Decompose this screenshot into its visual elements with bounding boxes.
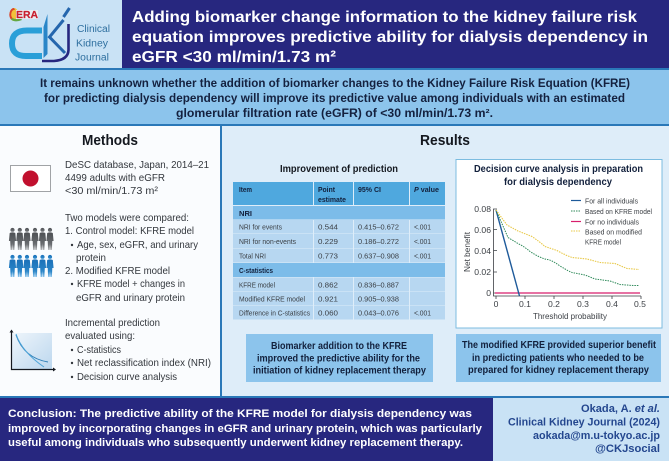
text: models compared: Two models were compared: <box>65 212 189 224</box>
table header: Point <box>318 185 335 194</box>
x axis labels: 0.2 <box>548 299 560 309</box>
row: NRI for non-events <box>233 234 445 248</box>
citation panel: Okada, A. et al. <box>581 403 660 415</box>
chart legend: Based on modified <box>585 228 642 236</box>
text: incremental prediction: Decision curve analysis <box>77 371 177 383</box>
chart title <box>474 163 643 188</box>
y axis labels: 0.02 <box>474 267 491 277</box>
callout: biomarker addition: initiation of kidney replacement therapy <box>253 364 426 376</box>
text: database and cohort: 4499 adults with eGFR <box>65 172 165 184</box>
chart legend <box>571 196 652 246</box>
row: NRI for non-events: <.001 <box>414 237 431 246</box>
icon: modified group people <box>9 255 54 277</box>
x axis labels: 0.1 <box>519 299 531 309</box>
section row: NRI: NRI <box>239 209 252 218</box>
conclusion banner: useful among individuals who subsequently underwent kidney replacement therapy. <box>8 437 463 449</box>
text: incremental prediction: evaluated using: <box>65 330 135 342</box>
icon: curve chart <box>10 330 56 372</box>
row: Difference in C-statistics: 0.043–0.076 <box>358 308 399 318</box>
callout: modified KFRE benefit: prepared for kidney replacement therapy <box>468 365 649 376</box>
panel: journal logo <box>0 0 122 68</box>
callout: biomarker addition <box>246 334 433 382</box>
row: NRI for events <box>233 220 445 234</box>
row: Difference in C-statistics: <.001 <box>414 308 431 318</box>
row: NRI for events: 0.544 <box>318 222 338 232</box>
chart legend: KFRE model <box>585 238 621 246</box>
conclusion banner: improved by incorporating changes in eGFR and urinary protein, which was particularly <box>8 423 483 435</box>
icon: control group people <box>9 228 54 250</box>
y axis labels: 0.04 <box>474 246 491 256</box>
row: Total NRI: 0.773 <box>318 252 338 260</box>
row: KFRE model: 0.862 <box>318 280 338 290</box>
row: Difference in C-statistics: Difference in C-statistics <box>239 308 310 318</box>
y axis labels <box>474 204 491 298</box>
citation panel: Clinical Kidney Journal (2024) <box>508 416 660 428</box>
background statement banner: for predicting dialysis dependency will improve its predictive value among individuals with an estimated <box>44 93 625 105</box>
row: KFRE model: 0.836–0.887 <box>358 280 399 290</box>
row: KFRE model: KFRE model <box>239 280 275 290</box>
curve: for all individuals <box>496 210 520 296</box>
row: Modified KFRE model: 0.905–0.938 <box>358 294 399 304</box>
background statement banner: glomerular filtration rate (eGFR) of <30 ml/min/1.73 m². <box>176 108 493 120</box>
title banner <box>122 0 669 68</box>
citation panel: @CKJsocial <box>595 443 660 455</box>
icon: CKJ monogram <box>12 8 70 61</box>
panel: results background <box>222 126 669 397</box>
icon: ERA badge: ERA <box>16 10 38 21</box>
text: models compared: protein <box>76 252 106 264</box>
table header: 95% CI <box>358 185 381 194</box>
y axis labels: 0.06 <box>474 225 491 235</box>
section row: C-statistics: C-statistics <box>239 266 273 275</box>
x axis labels: 0.3 <box>577 299 589 309</box>
chart legend: For all individuals <box>585 196 638 206</box>
callout: modified KFRE benefit <box>456 334 661 382</box>
heading: Results: Results <box>420 133 470 149</box>
chart legend: For no individuals <box>585 218 639 226</box>
row: Modified KFRE model <box>233 292 445 305</box>
conclusion banner: Conclusion: The predictive ability of the KFRE model for dialysis dependency was <box>8 408 472 420</box>
callout: biomarker addition: Biomarker addition to the KFRE <box>271 340 407 352</box>
row: NRI for events: 0.415–0.672 <box>358 222 399 232</box>
panel: decision curve analysis <box>456 160 662 328</box>
row: NRI for events: <.001 <box>414 222 431 232</box>
row: Total NRI: Total NRI <box>239 252 266 260</box>
curve: based on modified KFRE model <box>496 210 639 270</box>
row: KFRE model <box>233 278 445 292</box>
row: Modified KFRE model: Modified KFRE model <box>239 294 305 304</box>
icon: Japan flag <box>10 166 50 192</box>
row: Modified KFRE model: 0.921 <box>318 294 338 304</box>
text: database and cohort: <30 ml/min/1.73 m² <box>65 185 159 197</box>
text: journal name: Clinical <box>77 24 110 35</box>
row: Total NRI: <.001 <box>414 252 431 260</box>
heading: improvement of prediction: Improvement of prediction <box>280 163 398 175</box>
x axis labels: 0 <box>494 299 499 309</box>
text: database and cohort: DeSC database, Japan, 2014–21 <box>65 159 209 171</box>
callout: modified KFRE benefit: in predicting patients who needed to be <box>472 353 644 364</box>
table header: Item <box>239 185 252 194</box>
chart legend: Based on KFRE model <box>585 207 652 216</box>
curve: for no individuals <box>495 292 640 294</box>
text: models compared: 1. Control model: KFRE model <box>65 225 194 237</box>
y axis labels: 0.08 <box>474 204 491 214</box>
row: Difference in C-statistics <box>233 306 445 320</box>
text: models compared: KFRE model + changes in <box>77 278 185 290</box>
callout: biomarker addition: improved the predictive ability for the <box>257 352 420 364</box>
table header: P value <box>414 185 439 194</box>
section row: NRI <box>233 206 445 220</box>
table header: estimate <box>318 195 346 204</box>
curve: based on KFRE model <box>496 210 639 286</box>
axis title: threshold probability: Threshold probability <box>533 311 608 321</box>
text: incremental prediction: C-statistics <box>77 344 121 356</box>
text: models compared <box>65 212 199 304</box>
citation panel <box>493 398 669 461</box>
row: NRI for non-events: 0.229 <box>318 237 338 246</box>
background statement banner: It remains unknown whether the addition of biomarker changes to the Kidney Failure Risk Equation (KFRE) <box>40 78 630 90</box>
text: journal name: Kidney <box>76 38 108 50</box>
panel: methods background <box>0 126 220 397</box>
citation panel: aokada@m.u-tokyo.ac.jp <box>533 430 660 442</box>
text: journal name <box>75 24 110 64</box>
chart title: for dialysis dependency <box>504 176 612 188</box>
table header <box>233 182 445 205</box>
text: incremental prediction: Incremental prediction <box>65 317 160 329</box>
chart axes <box>494 209 641 299</box>
x axis labels: 0.5 <box>634 299 646 309</box>
row: NRI for non-events: 0.186–0.272 <box>358 237 399 246</box>
background statement banner <box>0 70 669 125</box>
row: NRI for events: NRI for events <box>239 222 282 232</box>
text: incremental prediction <box>65 317 211 383</box>
text: database and cohort <box>65 159 209 197</box>
title banner: Adding biomarker change information to the kidney failure risk <box>132 9 637 26</box>
title banner: equation improves predictive ability for dialysis dependency in <box>132 29 648 46</box>
row: NRI for non-events: NRI for non-events <box>239 237 296 246</box>
x axis labels: 0.4 <box>606 299 618 309</box>
axis title: net benefit: Net benefit <box>462 231 472 272</box>
table: improvement of prediction <box>233 182 445 320</box>
heading: Methods: Methods <box>82 133 138 149</box>
text: journal name: Journal <box>75 52 109 64</box>
text: incremental prediction: Net reclassification index (NRI) <box>77 357 211 369</box>
text: models compared: Age, sex, eGFR, and urinary <box>77 239 199 251</box>
text: models compared: eGFR and urinary protein <box>76 292 185 304</box>
section row: C-statistics <box>233 263 445 277</box>
row: Total NRI: 0.637–0.908 <box>358 252 399 260</box>
row: Difference in C-statistics: 0.060 <box>318 308 338 318</box>
title banner: eGFR <30 ml/min/1.73 m² <box>132 49 336 66</box>
conclusion banner <box>0 398 493 461</box>
chart title: Decision curve analysis in preparation <box>474 163 643 175</box>
text: models compared: 2. Modified KFRE model <box>65 265 170 277</box>
x axis labels <box>494 299 646 309</box>
row: Total NRI <box>233 248 445 262</box>
y axis labels: 0 <box>486 288 491 298</box>
